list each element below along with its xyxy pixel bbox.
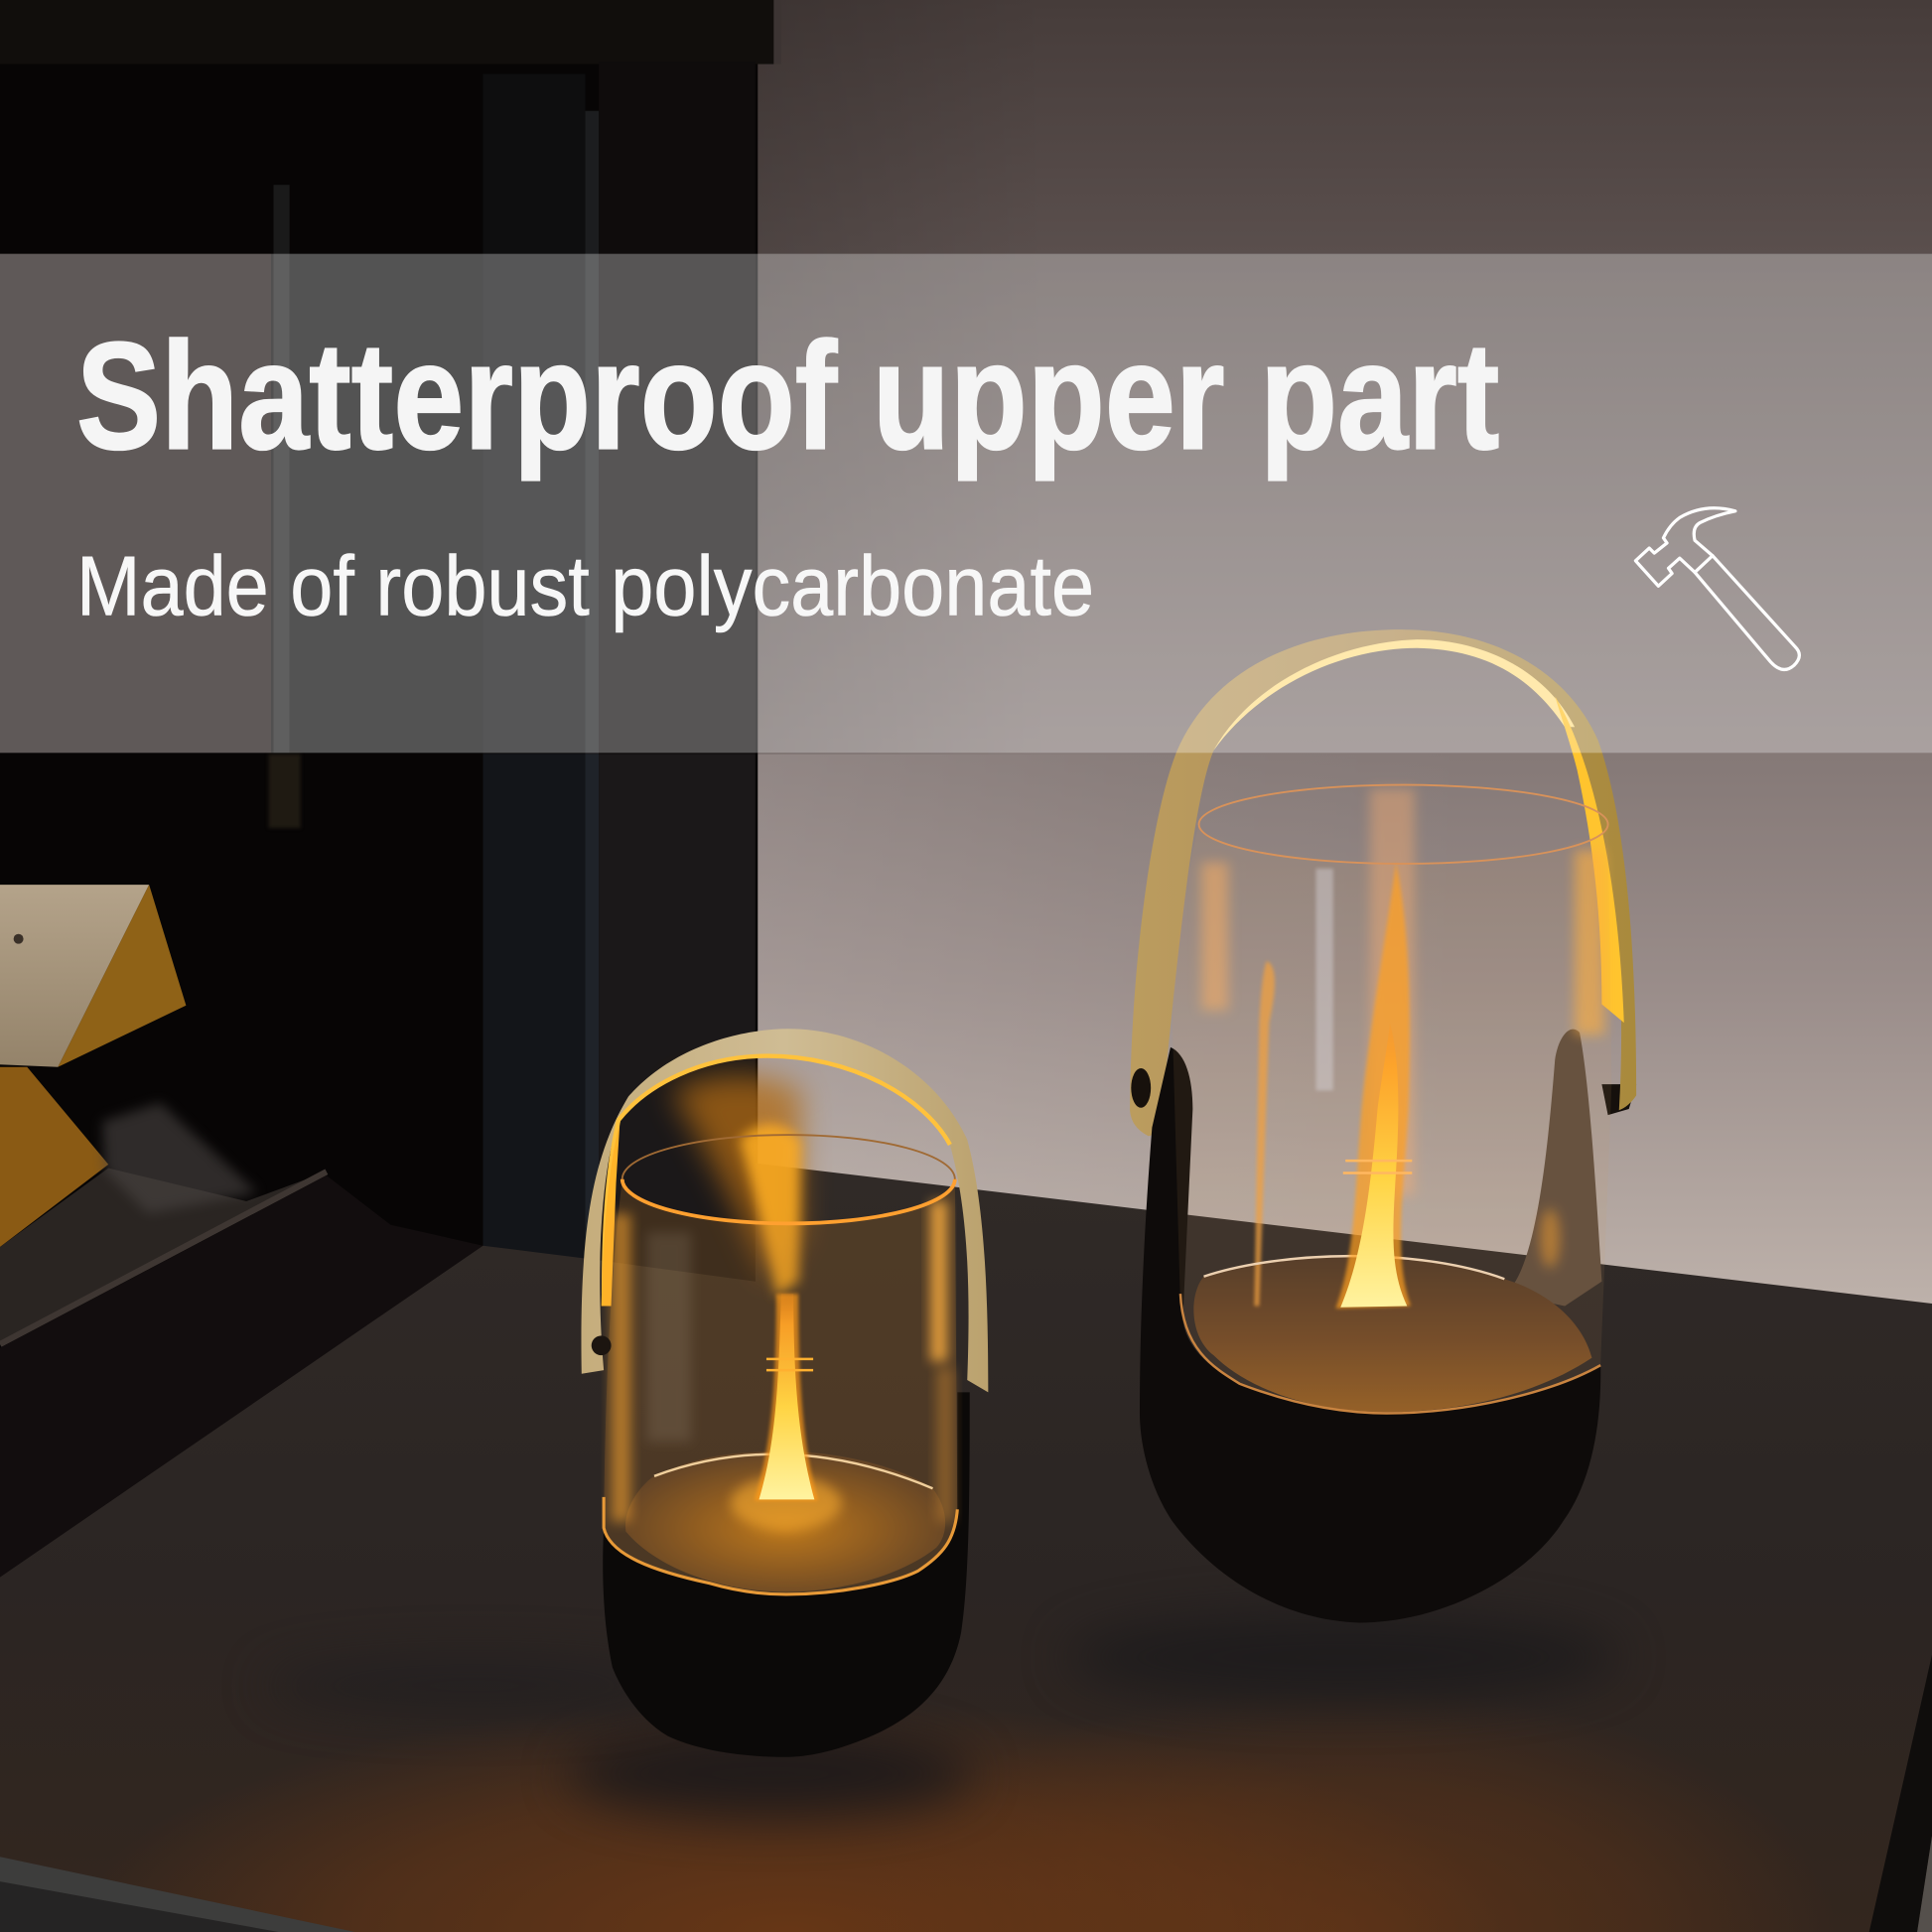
title: Shatterproof upper part <box>76 311 1499 482</box>
large lamp black base <box>1140 1047 1600 1622</box>
large lamp floor <box>1193 1256 1591 1412</box>
bottom left table edge <box>0 1857 354 1932</box>
lamp shadows <box>265 1613 1620 1819</box>
wall shading <box>756 0 1932 755</box>
small lamp black base <box>603 1392 970 1757</box>
large lamp handle light <box>1213 639 1624 1023</box>
firewood logs <box>0 885 186 1247</box>
small lamp smoke <box>671 1075 801 1297</box>
subtitle: Made of robust polycarbonate <box>76 538 1094 633</box>
wall highlight <box>756 755 1494 1355</box>
large lamp pivot <box>1131 1068 1151 1108</box>
small lamp pivot <box>592 1335 612 1355</box>
hearth lip <box>0 1172 327 1344</box>
ashes <box>102 1103 257 1213</box>
translucent banner <box>0 254 1932 753</box>
warm light on table <box>73 1686 1836 1932</box>
table corner shade <box>1869 1655 1932 1932</box>
wall <box>756 0 1932 1355</box>
large lamp glass <box>1173 788 1611 1414</box>
small lamp handle light <box>602 1056 950 1307</box>
large lamp glass rim <box>1199 785 1608 1279</box>
small lamp flame <box>731 1294 842 1530</box>
large lamp <box>1130 629 1636 1622</box>
large lamp handle <box>1130 629 1636 1136</box>
small lamp <box>581 1029 988 1757</box>
large lamp right stem <box>1506 1030 1636 1307</box>
small lamp glass <box>604 1179 957 1594</box>
small lamp handle <box>581 1029 988 1392</box>
small lamp floor <box>625 1451 945 1591</box>
icon: hammer <box>1635 508 1799 669</box>
tabletop <box>0 1164 1932 1932</box>
hearth base <box>0 1175 483 1578</box>
large lamp flame <box>1335 863 1412 1309</box>
fireplace floor <box>0 1169 327 1344</box>
small lamp glass rim <box>622 1135 955 1488</box>
fireplace dark surround <box>0 0 781 1601</box>
